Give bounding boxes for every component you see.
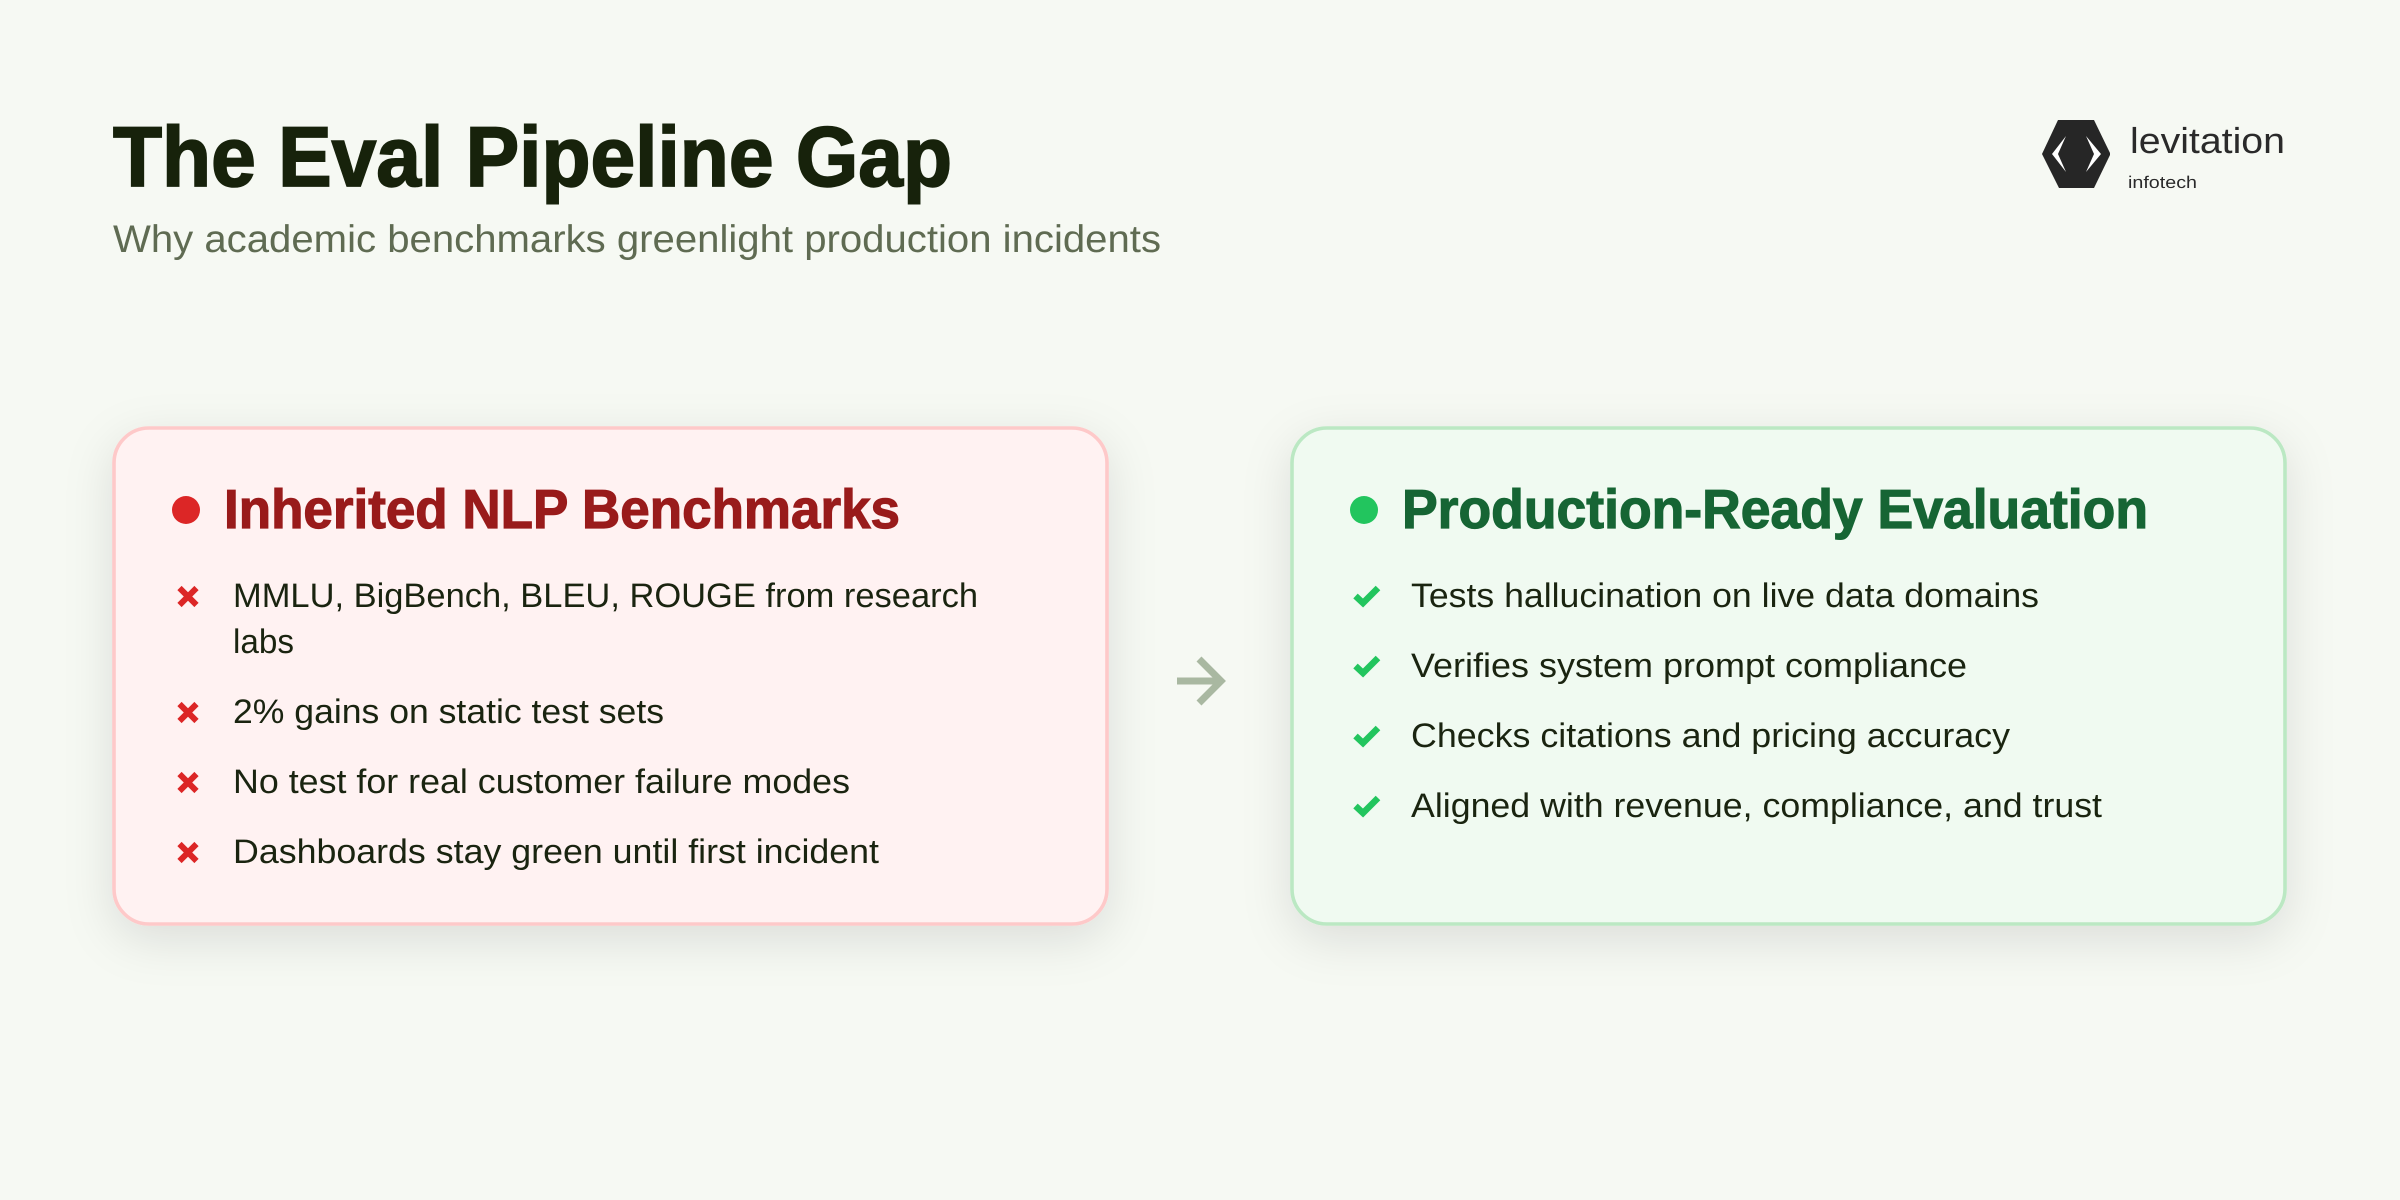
panel background <box>114 428 1107 924</box>
subtitle: Why academic benchmarks greenlight production incidents <box>113 218 1161 261</box>
icon: hexagon logo mark <box>2042 120 2110 188</box>
logo wordmark: levitation <box>2130 120 2285 161</box>
list item 1 <box>180 577 978 661</box>
panel background <box>1292 428 2285 924</box>
panel: inherited NLP benchmarks <box>114 428 1107 924</box>
arrow <box>1177 659 1221 703</box>
logo: levitation infotech <box>2042 120 2285 192</box>
list item 1: labs <box>233 623 294 661</box>
list item 3: No test for real customer failure modes <box>233 763 850 801</box>
logo sub-wordmark: infotech <box>2128 173 2197 192</box>
status dot <box>1350 496 1378 524</box>
list item 1: Tests hallucination on live data domains <box>1411 577 2039 615</box>
list item 2: Verifies system prompt compliance <box>1411 647 1967 685</box>
panel heading: Production-Ready Evaluation <box>1402 478 2148 540</box>
list item 1: MMLU, BigBench, BLEU, ROUGE from research <box>233 577 978 615</box>
status dot <box>172 496 200 524</box>
list item 2: 2% gains on static test sets <box>233 693 664 731</box>
title: The Eval Pipeline Gap <box>113 110 952 205</box>
panel heading: Inherited NLP Benchmarks <box>224 478 900 540</box>
list item 3: Checks citations and pricing accuracy <box>1411 717 2010 755</box>
list item 4: Aligned with revenue, compliance, and trust <box>1411 787 2103 825</box>
list item 4: Dashboards stay green until first incident <box>233 833 880 871</box>
panel: production-ready evaluation <box>1292 428 2285 924</box>
